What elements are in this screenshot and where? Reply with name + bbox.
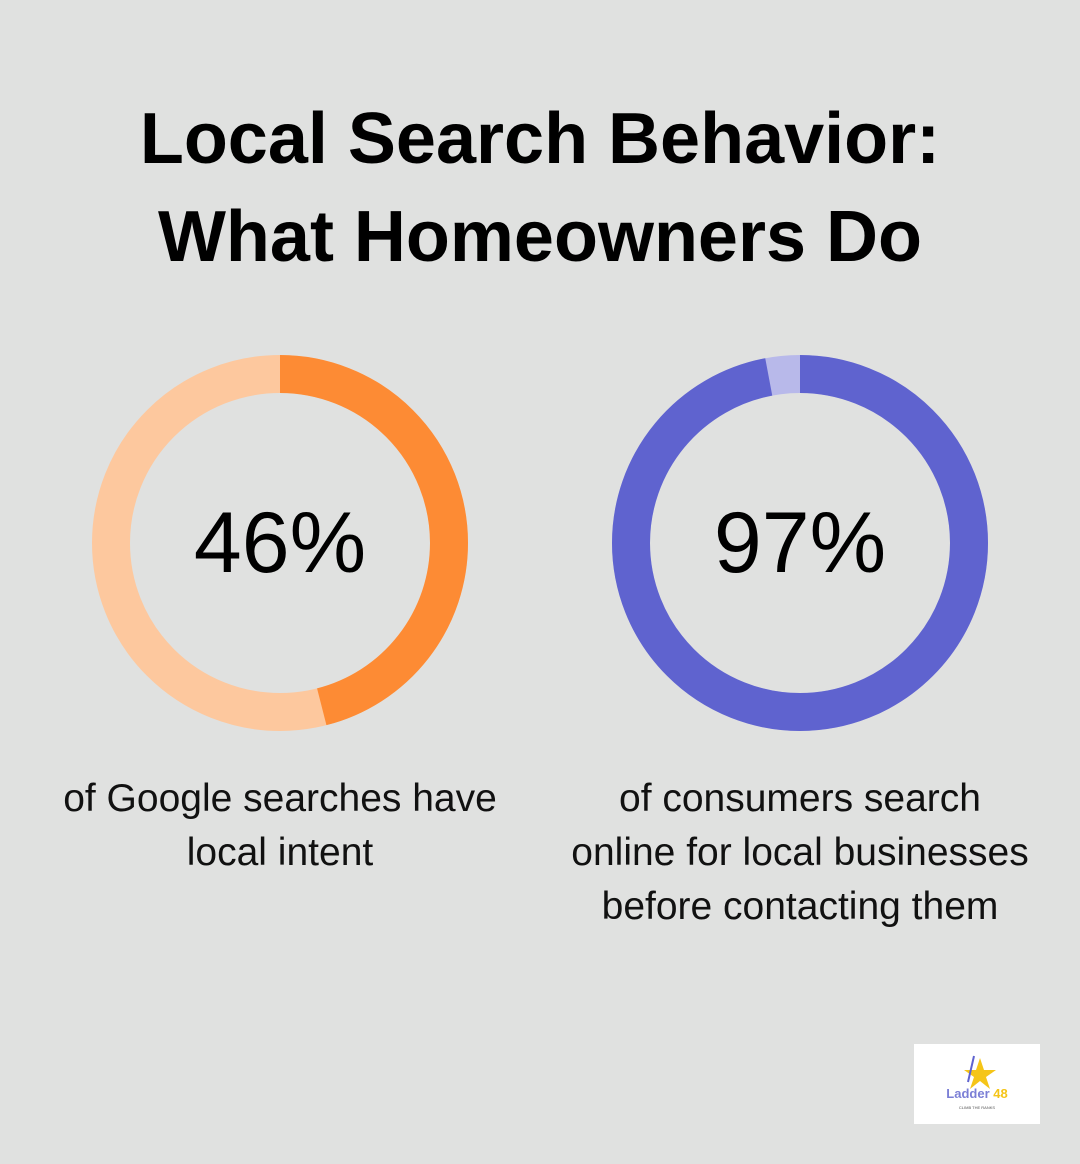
title: What Homeowners Do bbox=[158, 197, 922, 277]
caption right: online for local businesses bbox=[571, 831, 1029, 874]
caption left: of Google searches have bbox=[63, 777, 497, 820]
caption left bbox=[63, 777, 497, 874]
logo bbox=[914, 1044, 1040, 1124]
donut chart: 46% bbox=[92, 355, 468, 731]
donut chart: 97%: 97% bbox=[714, 495, 886, 591]
caption right: before contacting them bbox=[602, 885, 998, 928]
donut chart: 97% bbox=[612, 355, 988, 731]
title bbox=[140, 99, 940, 277]
logo: Ladder 48 bbox=[946, 1086, 1008, 1101]
logo: CLIMB THE RANKS bbox=[959, 1105, 995, 1110]
donut chart: 46%: 46% bbox=[194, 495, 366, 591]
caption right: of consumers search bbox=[619, 777, 981, 820]
caption right bbox=[571, 777, 1029, 928]
caption left: local intent bbox=[187, 831, 373, 874]
title: Local Search Behavior: bbox=[140, 99, 940, 179]
